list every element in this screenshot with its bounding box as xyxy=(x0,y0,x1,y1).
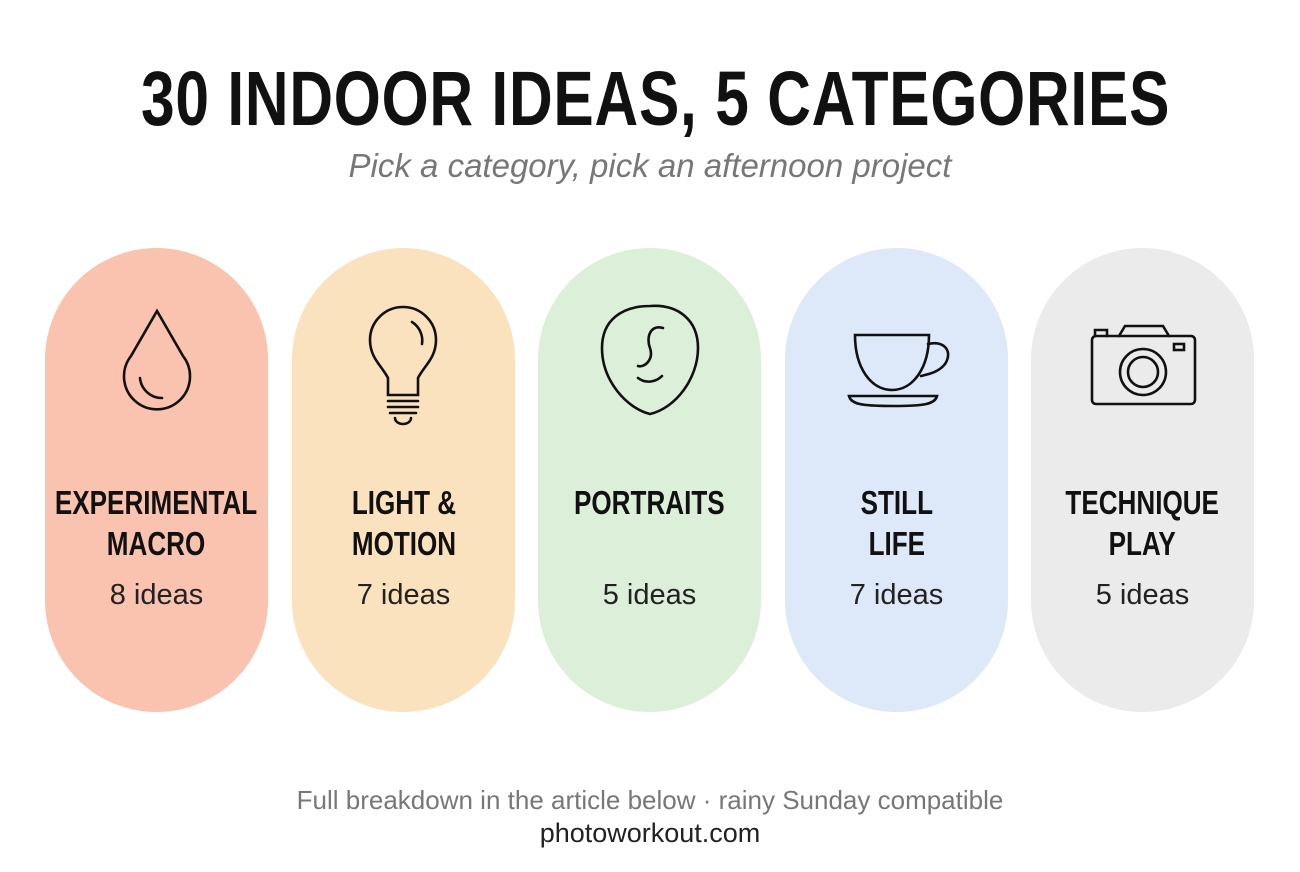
footer site: photoworkout.com xyxy=(540,818,760,848)
label: STILL xyxy=(860,484,933,521)
panel: still life xyxy=(785,248,1008,712)
title: 30 INDOOR IDEAS, 5 CATEGORIES xyxy=(141,56,1170,142)
footer note: Full breakdown in the article below · rainy Sunday compatible xyxy=(297,785,1003,815)
label: PLAY xyxy=(1109,525,1176,562)
label: EXPERIMENTAL xyxy=(55,484,258,521)
label xyxy=(55,484,258,562)
label xyxy=(351,484,456,562)
label: PORTRAITS xyxy=(574,484,725,521)
panel: experimental macro xyxy=(45,248,268,712)
label: TECHNIQUE xyxy=(1066,484,1219,521)
panel: portraits xyxy=(538,248,761,712)
count: 7 ideas xyxy=(357,579,450,611)
icon: face xyxy=(600,304,700,416)
icon: water drop xyxy=(122,308,192,411)
label xyxy=(860,484,933,562)
icon: coffee cup xyxy=(847,334,950,408)
icon: camera xyxy=(1090,324,1196,406)
panel: light & motion xyxy=(292,248,515,712)
count: 5 ideas xyxy=(1096,579,1189,611)
panel: technique play xyxy=(1031,248,1254,712)
label: LIGHT & xyxy=(351,484,456,521)
label xyxy=(1066,484,1219,562)
subtitle: Pick a category, pick an afternoon project xyxy=(349,147,951,184)
count: 7 ideas xyxy=(850,579,943,611)
count: 8 ideas xyxy=(110,579,203,611)
count: 5 ideas xyxy=(603,579,696,611)
label: MOTION xyxy=(351,525,456,562)
label: LIFE xyxy=(868,525,925,562)
icon: light bulb xyxy=(368,306,438,426)
label: MACRO xyxy=(107,525,206,562)
